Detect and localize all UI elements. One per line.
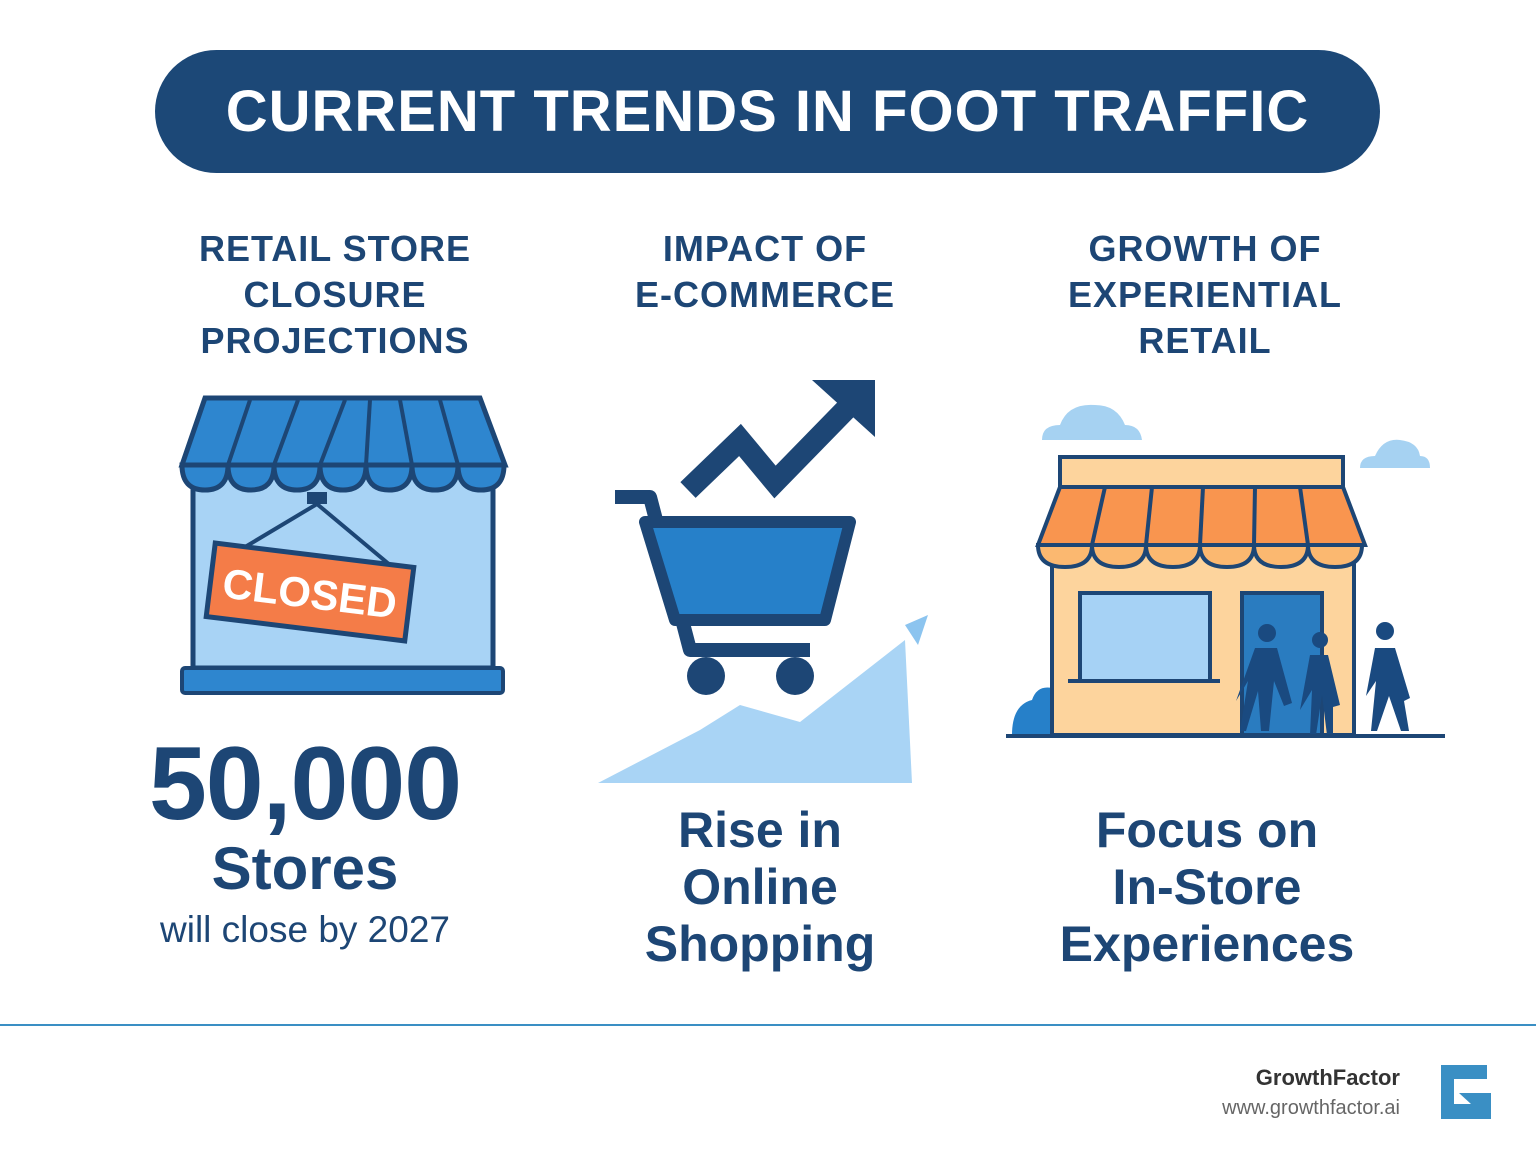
text: rise in online shopping: Online — [682, 859, 838, 915]
icon: closed store — [178, 396, 508, 695]
icon: experiential store — [1006, 404, 1445, 738]
icon: shopping cart with growth — [598, 380, 928, 783]
heading: retail store closure — [199, 228, 471, 361]
heading: experiential retail: GROWTH OF — [1089, 228, 1321, 269]
heading: experiential retail: RETAIL — [1138, 320, 1272, 361]
logo: G — [1441, 1065, 1491, 1119]
icon: closed store: CLOSED — [220, 559, 400, 627]
heading: retail store closure: PROJECTIONS — [200, 320, 470, 361]
heading: retail store closure: CLOSURE — [243, 274, 426, 315]
heading: e-commerce: E-COMMERCE — [635, 274, 895, 315]
text: rise in online shopping: Rise in — [678, 802, 842, 858]
footer brand text: GrowthFactor — [1256, 1065, 1400, 1090]
footer brand text — [1222, 1065, 1400, 1119]
footer brand text: www.growthfactor.ai — [1222, 1097, 1400, 1119]
text: focus on in-store experiences — [1060, 802, 1354, 972]
heading: e-commerce: IMPACT OF — [663, 228, 867, 269]
title: CURRENT TRENDS IN FOOT TRAFFIC — [226, 79, 1309, 144]
text: focus on in-store experiences: In-Store — [1113, 859, 1301, 915]
title — [155, 50, 1380, 173]
text: rise in online shopping — [645, 802, 875, 972]
heading: e-commerce — [635, 228, 895, 315]
heading: experiential retail — [1068, 228, 1342, 361]
text: focus on in-store experiences: Focus on — [1096, 802, 1318, 858]
text: focus on in-store experiences: Experiences — [1060, 916, 1354, 972]
stat: 50,000 stores: Stores — [212, 835, 398, 902]
stat: 50,000 stores: 50,000 — [149, 726, 461, 842]
stat: 50,000 stores — [149, 726, 461, 950]
heading: experiential retail: EXPERIENTIAL — [1068, 274, 1342, 315]
heading: retail store closure: RETAIL STORE — [199, 228, 471, 269]
text: rise in online shopping: Shopping — [645, 916, 875, 972]
stat: 50,000 stores: will close by 2027 — [160, 909, 450, 950]
